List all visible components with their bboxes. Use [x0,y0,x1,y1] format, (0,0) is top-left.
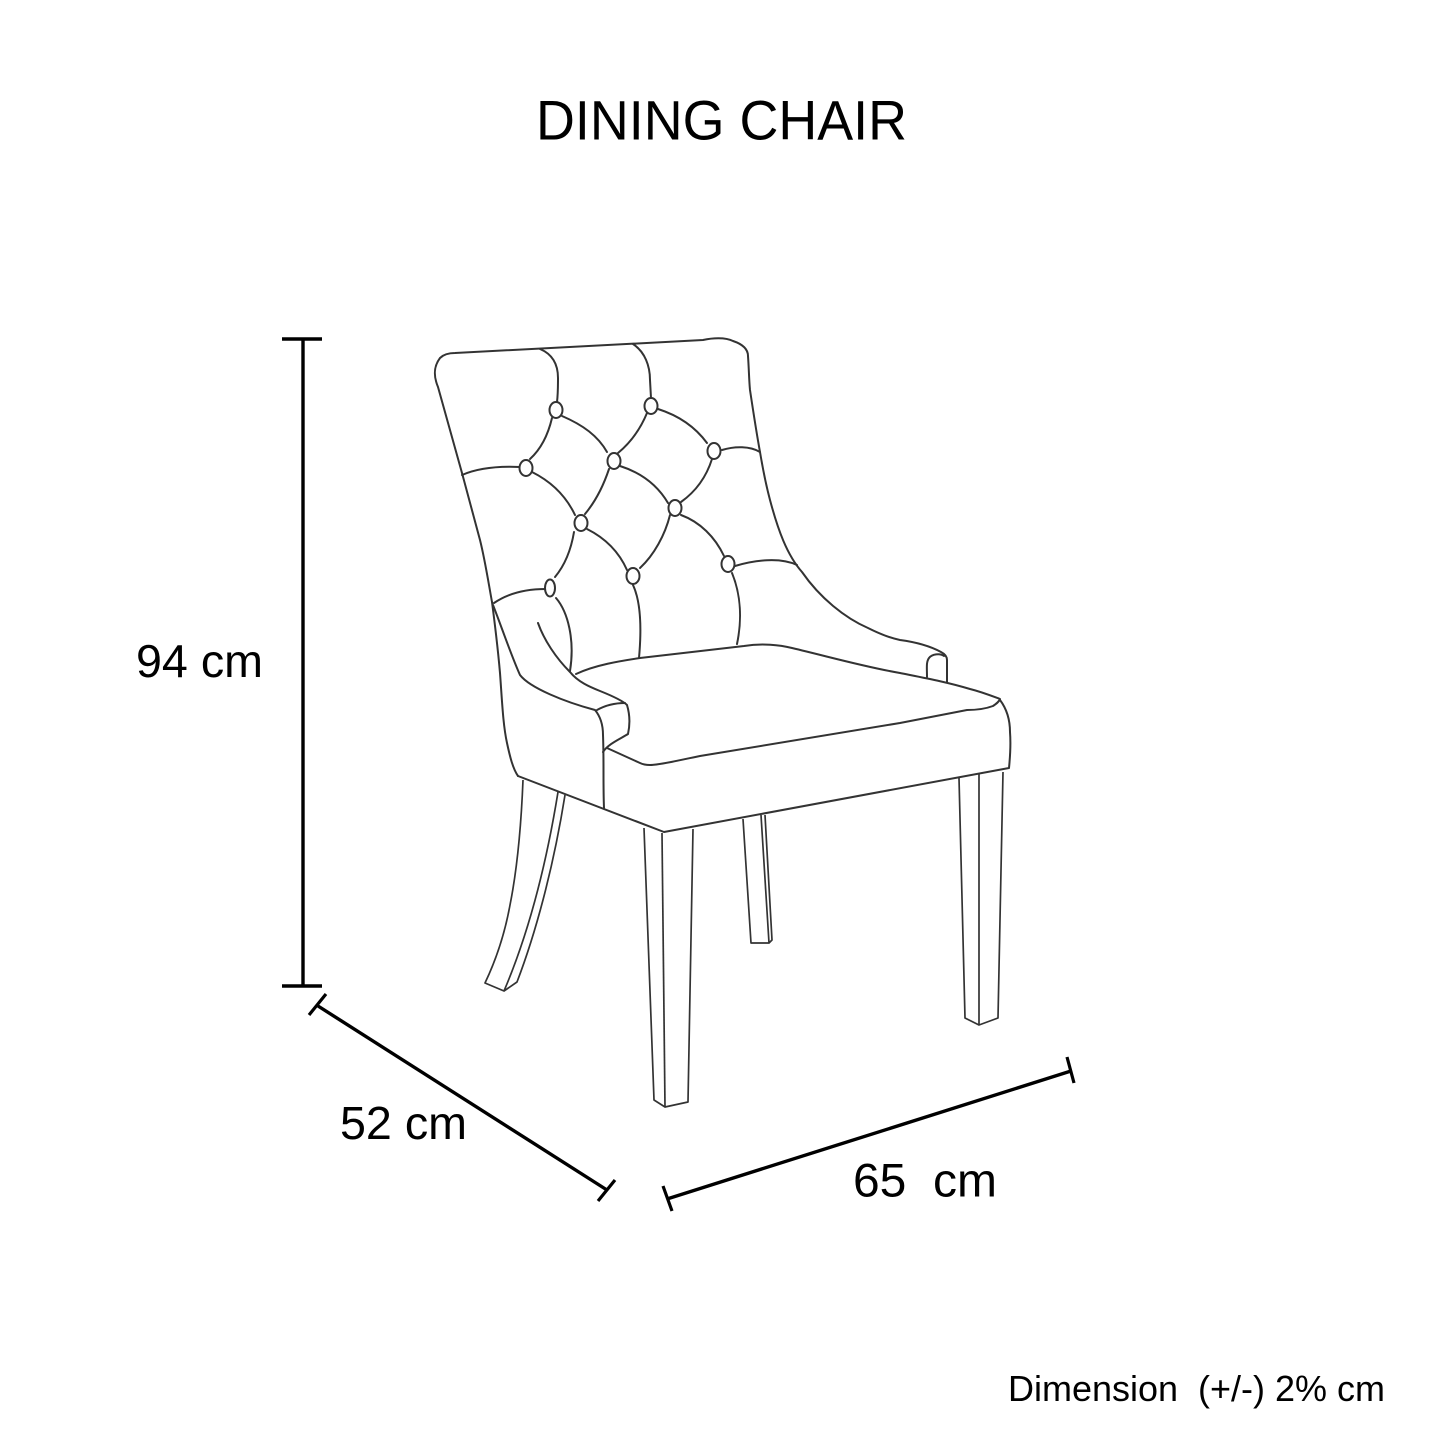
title: DINING CHAIR [536,88,907,152]
dimension: height [136,339,322,986]
chair front legs [644,772,1003,1107]
label: 52 cm: 52 cm [340,1097,467,1149]
left arm [492,602,629,808]
seat base [518,700,1010,832]
dimension: depth [309,994,615,1201]
chair backrest outline [435,338,947,682]
label: 65 cm: 65 cm [853,1154,997,1206]
seat cushion [576,645,1000,765]
chair illustration [435,338,1010,1107]
backrest tufting buttons [520,398,734,596]
label: 94 cm: 94 cm [136,635,263,687]
backrest tufting seams [462,344,797,671]
tolerance note: Dimension (+/-) 2% cm [1008,1368,1385,1409]
dimension: width [663,1057,1074,1211]
right arm end [927,654,944,677]
chair back rear legs [485,780,772,991]
